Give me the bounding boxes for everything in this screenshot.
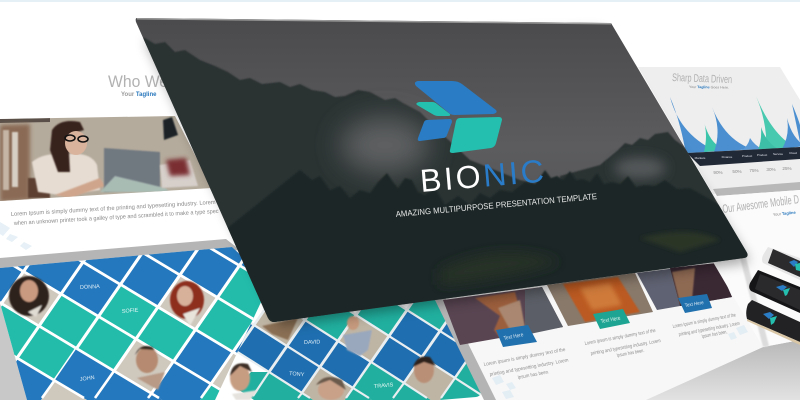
- panel: sharp data driven slide: [638, 67, 800, 196]
- column text two: Ipsum has been.: [616, 348, 645, 359]
- brand name: BIONIC: [419, 153, 545, 199]
- area chart: [670, 96, 800, 154]
- slide heading: Who We: [108, 72, 168, 91]
- tag: text here teal: Text Here: [600, 316, 621, 325]
- name labels: [79, 284, 394, 390]
- slide background: [638, 67, 800, 194]
- percentage row: 50%: [732, 169, 742, 174]
- column text three: Ipsum has been.: [701, 329, 728, 340]
- column text three: Lorem Ipsum is simply dummy text of the: [672, 312, 736, 330]
- chart axis strip: Finance: [722, 155, 733, 159]
- body text: [11, 200, 219, 227]
- portrait: man with glasses: [316, 377, 346, 400]
- panel: text here slide: [434, 250, 763, 400]
- tag: text here blue small: [678, 294, 712, 313]
- logo: top blue facet: [415, 81, 497, 115]
- tag: text here teal: [593, 309, 630, 329]
- column text one: Lorem Ipsum is simply dummy text of the: [483, 347, 566, 368]
- cat photo: [547, 273, 653, 326]
- panel: mobile slide: [700, 190, 800, 347]
- chart axis strip: Cloud: [789, 151, 797, 155]
- tag: text here blue small: Text Here: [684, 300, 704, 309]
- phone: white: [762, 247, 800, 280]
- subtitle: AMAZING MULTIPURPOSE PRESENTATION TEMPLATE: [395, 191, 598, 219]
- tag: text here blue: Text Here: [503, 332, 524, 342]
- logo: big teal facet: [450, 117, 502, 153]
- slide tagline: Your Tagline Goes Here.: [689, 85, 729, 90]
- slide background: [700, 190, 800, 347]
- percentage row: 30%: [766, 167, 776, 172]
- column text one: Ipsum has been.: [517, 369, 550, 381]
- portrait: dark hair man: [135, 346, 165, 390]
- logo: [415, 81, 502, 153]
- chart axis strip: Markets: [695, 156, 706, 160]
- portrait: bearded man: [413, 356, 436, 383]
- name labels: DONNA: [80, 284, 100, 291]
- column text three: [672, 312, 740, 340]
- near forest: [228, 170, 748, 322]
- chart axis strip: Product: [757, 153, 767, 157]
- logo: small teal facet: [416, 102, 450, 116]
- column text three: printing and typesetting industry. Lorem: [678, 321, 740, 338]
- cover photo: [130, 15, 760, 330]
- slide edge shade: [738, 250, 769, 347]
- percentage row: 25%: [782, 166, 792, 171]
- name labels: DAVID: [304, 339, 320, 346]
- grey divider: [713, 182, 800, 196]
- decorative pixels: [492, 325, 748, 399]
- tag: text here blue: [496, 325, 537, 347]
- portrait: smiling man: [230, 363, 258, 400]
- column text one: printing and typesetting industry. Lorem: [489, 357, 569, 378]
- percentage row: [713, 166, 792, 175]
- phones: [746, 247, 800, 345]
- name labels: TRAVIS: [374, 382, 394, 390]
- portrait: red hair woman: [170, 281, 204, 326]
- third animal photo: [637, 263, 732, 310]
- slide tagline: Your Tagline: [121, 92, 157, 98]
- column text two: [584, 328, 661, 359]
- panel: main bionic cover slide: [130, 15, 760, 330]
- body text: Lorem Ipsum is simply dummy text of the printing and typesetting industry. Lorem: [11, 200, 216, 218]
- chart axis strip: Product: [742, 154, 752, 158]
- portrait: curly hair woman: [9, 276, 49, 317]
- name labels: JOHN: [79, 375, 95, 383]
- name labels: TONY: [289, 371, 305, 378]
- logo: lower blue facet: [418, 119, 452, 141]
- right lattice: [237, 300, 480, 400]
- grey band: [0, 239, 240, 270]
- panel: who we are slide: [0, 72, 240, 270]
- phone: gold: [746, 300, 800, 345]
- slide tagline: Your Tagline: [773, 210, 797, 217]
- slide title: Sharp Data Driven: [672, 72, 732, 86]
- chart axis strip: [687, 147, 800, 166]
- slide body: [440, 250, 763, 400]
- portrait: man in blue shirt: [343, 316, 372, 356]
- column text two: printing and typesetting industry. Lorem: [590, 338, 661, 357]
- column text one: [483, 347, 569, 381]
- panel: team diamond grid: [0, 247, 480, 400]
- hero photo: [0, 116, 210, 201]
- left lattice: [0, 247, 261, 400]
- percentage row: 90%: [713, 170, 723, 175]
- back ridge right: [560, 132, 718, 204]
- misty far forest: [143, 38, 535, 322]
- name labels: SOFIE: [122, 308, 139, 315]
- column text two: Lorem Ipsum is simply dummy text of the: [584, 328, 656, 347]
- percentage row: 75%: [749, 168, 759, 173]
- phone: black: [749, 270, 800, 313]
- decorative pixel corner: [0, 222, 32, 250]
- fog: [340, 117, 430, 173]
- main slide shadow: [145, 30, 750, 326]
- body text: when an unknown printer took a galley of type and scrambled it to make a type spec: [13, 209, 219, 227]
- soft floor shadow: [0, 265, 800, 400]
- deer photo: [443, 287, 563, 345]
- chart axis strip: Service: [773, 152, 783, 156]
- portrait: blonde woman: [262, 318, 298, 340]
